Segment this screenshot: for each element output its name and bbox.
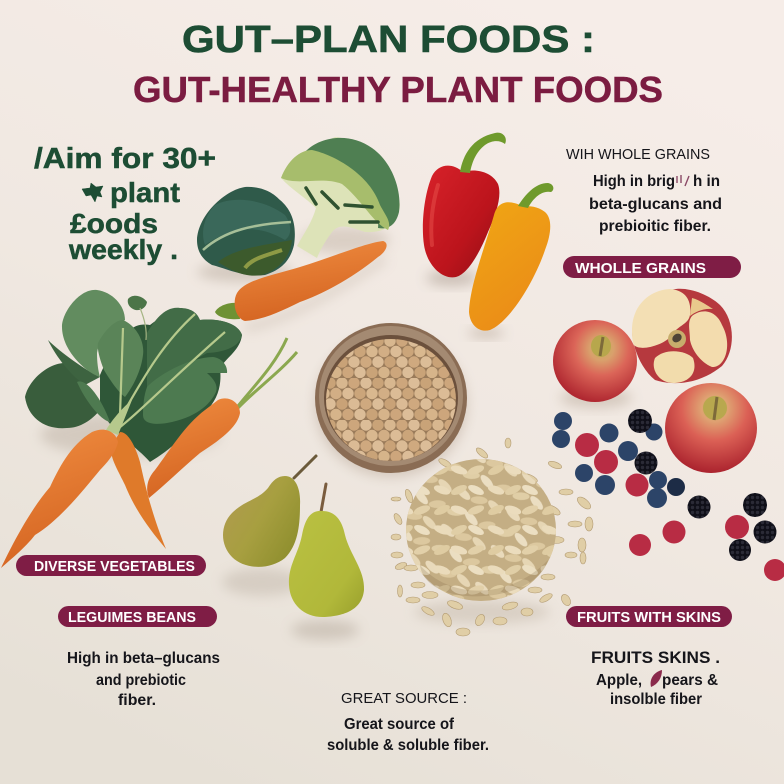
- callout: aim for 30+ plant foods weekly: weekly .: [68, 234, 178, 265]
- text block: fruits skins: Apple,: [596, 672, 642, 689]
- illustration: berries: [552, 409, 784, 581]
- label: whole grains: [563, 256, 741, 278]
- callout: aim for 30+ plant foods weekly: [34, 143, 216, 265]
- text block: legumes description: fiber.: [118, 692, 156, 709]
- illustration: red pepper: [423, 133, 506, 286]
- label: diverse vegetables: [16, 555, 206, 576]
- text block: great source: [327, 690, 489, 754]
- title: [133, 19, 663, 110]
- text block: legumes description: High in beta–glucans: [67, 650, 220, 667]
- label: fruits with skins: FRUITS WITH SKINS: [577, 610, 721, 626]
- text block: fruits skins: insolble fiber: [610, 691, 702, 708]
- illustration: lower carrots: [1, 338, 297, 568]
- illustration: pears: [222, 456, 364, 640]
- illustration: bowl of beans: [315, 323, 467, 477]
- callout: whole grains text: beta-glucans and: [589, 196, 722, 213]
- label: legumes beans: LEGUIMES BEANS: [68, 610, 196, 626]
- illustration: broccoli: [281, 137, 400, 258]
- illustration: cabbage: [197, 187, 295, 282]
- title: GUT–PLAN FOODS :: [182, 19, 595, 61]
- text block: fruits skins: [591, 648, 720, 708]
- text block: fruits skins: pears &: [662, 672, 718, 689]
- callout: whole grains text: h in: [693, 173, 720, 190]
- text block: fruits skins: FRUITS SKINS .: [591, 648, 720, 667]
- callout: whole grains text: WIH WHOLE GRAINS: [566, 146, 710, 163]
- callout: whole grains text: [566, 146, 722, 235]
- label: legumes beans: [58, 606, 217, 627]
- text block: great source: soluble & soluble fiber.: [327, 737, 489, 754]
- illustration: spinach: [25, 290, 242, 462]
- text block: great source: GREAT SOURCE :: [341, 690, 467, 707]
- text block: legumes description: and prebiotic: [96, 672, 186, 689]
- text block: great source: Great source of: [344, 716, 455, 733]
- text block: legumes description: [67, 650, 220, 709]
- title: GUT-HEALTHY PLANT FOODS: [133, 69, 663, 110]
- label: diverse vegetables: DIVERSE VEGETABLES: [34, 559, 195, 575]
- callout: aim for 30+ plant foods weekly: plant: [110, 177, 180, 208]
- illustration: yellow pepper: [468, 183, 553, 338]
- label: fruits with skins: [566, 606, 732, 627]
- callout: aim for 30+ plant foods weekly: £oods: [70, 208, 158, 239]
- illustration: top carrot: [215, 241, 387, 328]
- illustration: oats pile: [391, 438, 593, 636]
- callout: whole grains text: High in brig: [593, 173, 675, 190]
- label: whole grains: WHOLLE GRAINS: [575, 260, 706, 277]
- illustration: apples: [553, 289, 757, 473]
- callout: aim for 30+ plant foods weekly: /Aim for 30+: [34, 143, 216, 175]
- callout: whole grains text: prebioitic fiber.: [599, 218, 711, 235]
